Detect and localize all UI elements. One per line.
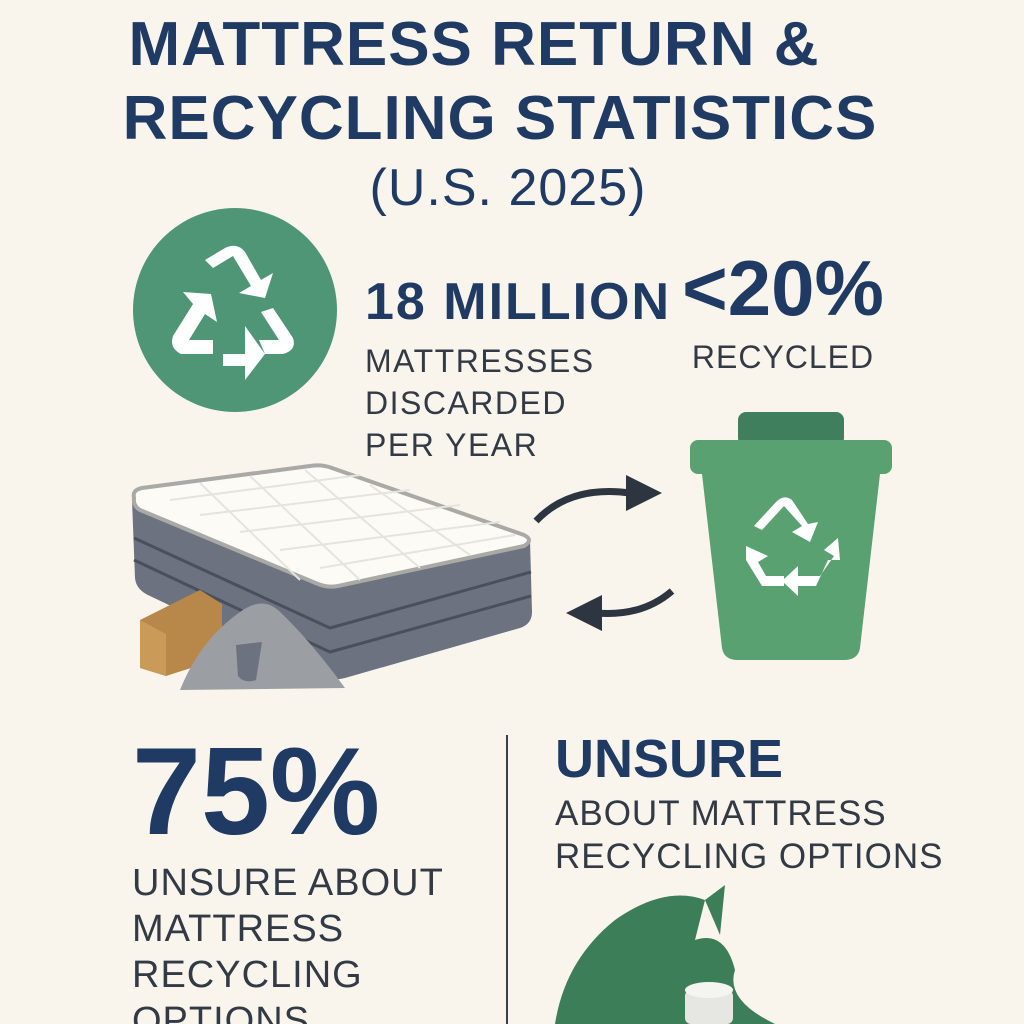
illustration: mattress bbox=[132, 463, 532, 690]
icon: recycle circle bbox=[133, 208, 337, 412]
arrow: back to mattress bbox=[566, 588, 674, 631]
stat: <20% recycled: <20% bbox=[682, 244, 884, 332]
stat: 18 million: DISCARDED bbox=[365, 385, 567, 421]
stat: 18 million: 18 MILLION bbox=[365, 273, 671, 331]
text: unsure right: RECYCLING OPTIONS bbox=[555, 837, 943, 876]
title: RECYCLING STATISTICS bbox=[123, 84, 877, 153]
divider bbox=[506, 735, 508, 1024]
text: unsure right: ABOUT MATTRESS bbox=[555, 794, 887, 833]
title: MATTRESS RETURN & bbox=[129, 10, 819, 79]
title bbox=[123, 10, 877, 153]
stat: 18 million: PER YEAR bbox=[365, 427, 538, 463]
stat: <20% recycled bbox=[682, 244, 884, 375]
stat: 75% unsure bbox=[132, 723, 444, 1024]
stat: 75% unsure: 75% bbox=[132, 723, 380, 861]
stat: 75% unsure: RECYCLING bbox=[132, 954, 363, 996]
stat: 75% unsure: UNSURE ABOUT bbox=[132, 862, 444, 904]
stat: 75% unsure: MATTRESS bbox=[132, 908, 344, 950]
subtitle: (U.S. 2025) bbox=[370, 159, 646, 217]
illustration: green wave bbox=[555, 885, 775, 1024]
arrow: to bin bbox=[534, 475, 662, 524]
stat: 18 million bbox=[365, 273, 671, 463]
icon: recycling bin bbox=[690, 412, 892, 660]
stat: <20% recycled: RECYCLED bbox=[692, 339, 874, 375]
stat: 18 million: MATTRESSES bbox=[365, 343, 595, 379]
text: unsure right: UNSURE bbox=[555, 729, 783, 789]
text: unsure right bbox=[555, 729, 943, 876]
